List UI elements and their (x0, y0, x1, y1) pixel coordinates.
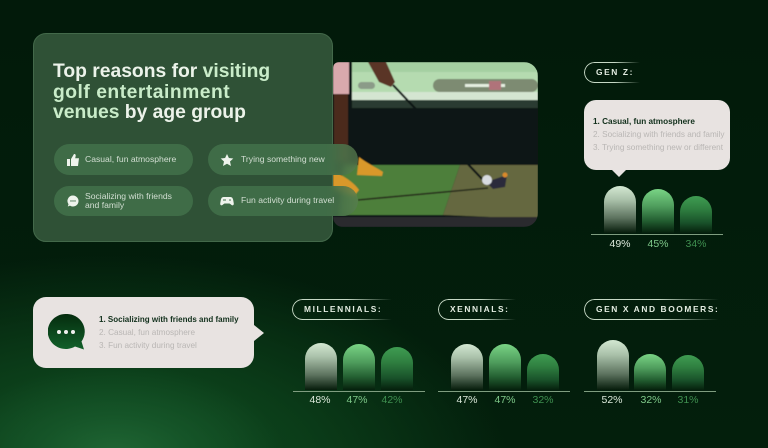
reason: socializing with friends and family: Socializing with friends (85, 190, 172, 200)
bar chart: Millennials: 42% (381, 394, 402, 406)
callout pointer (254, 325, 264, 341)
label: Xennials: XENNIALS: (450, 304, 510, 314)
callout: Gen Z top reasons: 3. Trying something new or different (593, 143, 723, 152)
callout: Gen Z top reasons (584, 100, 730, 170)
bar chart: Xennials: 32% (532, 394, 554, 406)
bar chart: Gen Z: 34% (685, 238, 706, 250)
bar chart: Gen Z (591, 186, 723, 250)
icon: speech bubble (48, 314, 85, 350)
callout: Millennials top reasons (33, 297, 254, 368)
reason: fun activity during travel: Fun activity during travel (241, 195, 334, 205)
title: venues by age group (53, 102, 246, 123)
bar chart: Xennials (438, 344, 570, 406)
title (53, 61, 270, 123)
bar chart: Xennials: 47% (494, 394, 516, 406)
reason: socializing with friends and family: and family (85, 200, 124, 210)
photo: golf simulator swing (333, 62, 538, 227)
bar chart: Gen X and Boomers: 31% (677, 394, 698, 406)
callout: Millennials top reasons: 3. Fun activity during travel (99, 341, 197, 350)
reason: socializing with friends and family (54, 186, 193, 216)
bar chart: Millennials (293, 343, 425, 406)
bar chart: Millennials: 48% (309, 394, 330, 406)
bar chart: Gen Z: 45% (647, 238, 668, 250)
panel: title card (33, 33, 333, 242)
title: Top reasons for visiting (53, 61, 270, 82)
title: golf entertainment (53, 82, 230, 102)
bar chart: Gen Z: 49% (609, 238, 630, 250)
label: Gen Z: GEN Z: (596, 67, 634, 77)
reason: trying something new (208, 144, 358, 175)
reason: casual, fun atmosphere (54, 144, 193, 175)
bar chart: Gen X and Boomers (584, 340, 716, 406)
reason: casual, fun atmosphere: Casual, fun atmosphere (85, 154, 176, 164)
bar chart: Xennials: 47% (456, 394, 478, 406)
callout pointer (611, 169, 627, 177)
callout: Gen Z top reasons: 1. Casual, fun atmosphere (593, 117, 695, 126)
bar chart: Gen X and Boomers: 52% (601, 394, 622, 406)
reason: trying something new: Trying something new (241, 154, 325, 164)
reason: fun activity during travel (208, 186, 358, 216)
callout: Millennials top reasons: 2. Casual, fun atmosphere (99, 328, 195, 337)
label: Millennials: MILLENNIALS: (304, 304, 382, 314)
label: Gen X and Boomers: GEN X AND BOOMERS: (596, 304, 719, 314)
bar chart: Gen X and Boomers: 32% (640, 394, 662, 406)
callout: Gen Z top reasons: 2. Socializing with friends and family (593, 130, 725, 139)
callout: Millennials top reasons: 1. Socializing with friends and family (99, 315, 239, 324)
bar chart: Millennials: 47% (346, 394, 368, 406)
